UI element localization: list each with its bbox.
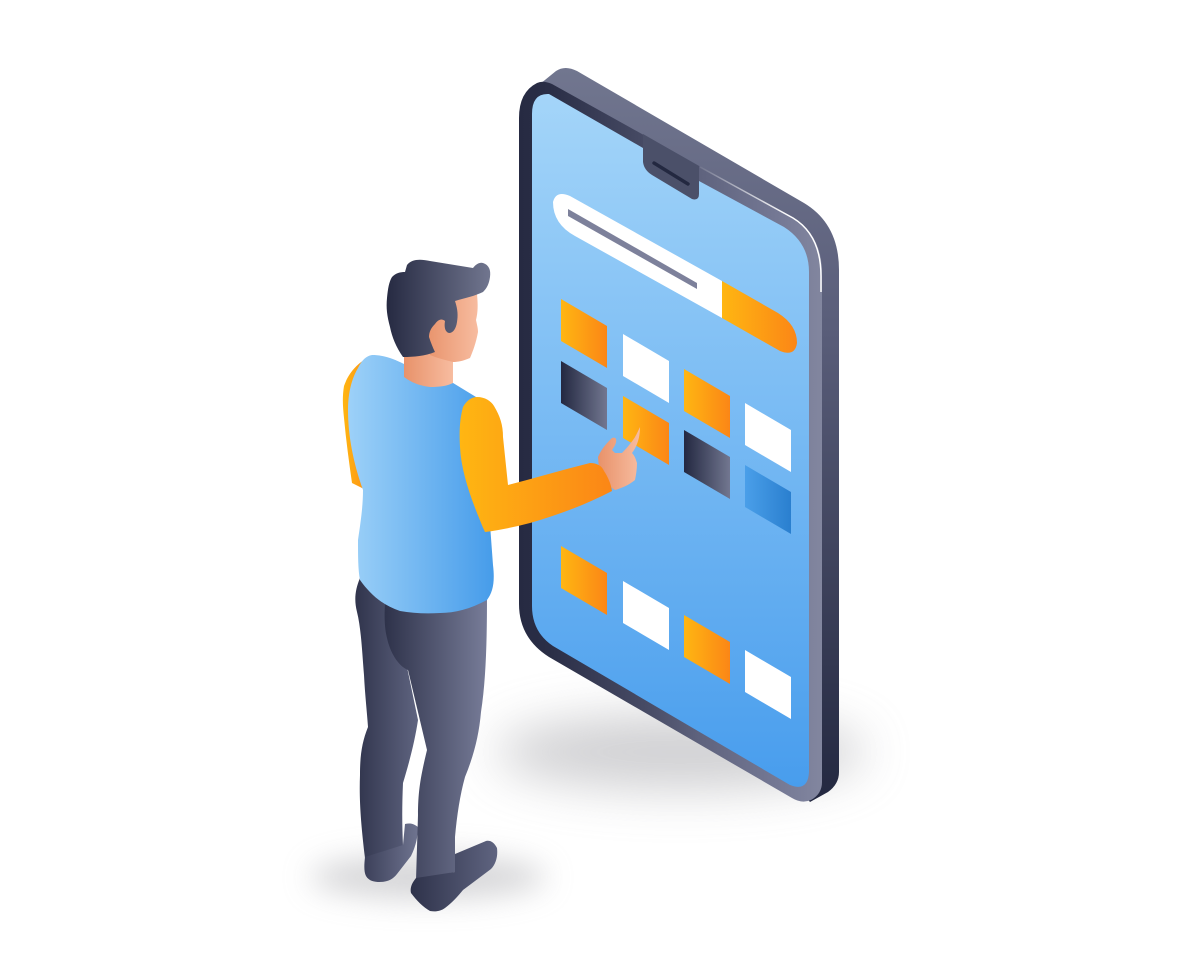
front leg [385,596,487,880]
hand [598,427,640,490]
hair [387,260,490,357]
phone body side [540,68,839,802]
phone front frame [519,82,822,802]
search field [553,194,722,318]
shadow: phone [495,714,865,790]
search button [722,281,797,353]
person [343,260,640,911]
frame highlight [700,167,821,292]
far arm [343,355,375,489]
speaker slot [654,163,688,184]
tile row 2 [561,361,607,430]
notch [643,134,699,199]
search bar [553,194,797,353]
front foot [411,841,497,911]
near arm [460,397,612,532]
back leg [355,578,418,858]
app tiles [561,299,791,719]
vest [348,355,494,613]
back foot [364,823,418,882]
neck [404,352,453,387]
shadow: person [310,855,546,899]
search text line [568,209,697,289]
phone screen [532,94,809,787]
tile row 3 [561,546,607,615]
tile row 1 [561,299,607,368]
face [425,294,478,362]
smartphone [519,68,839,802]
